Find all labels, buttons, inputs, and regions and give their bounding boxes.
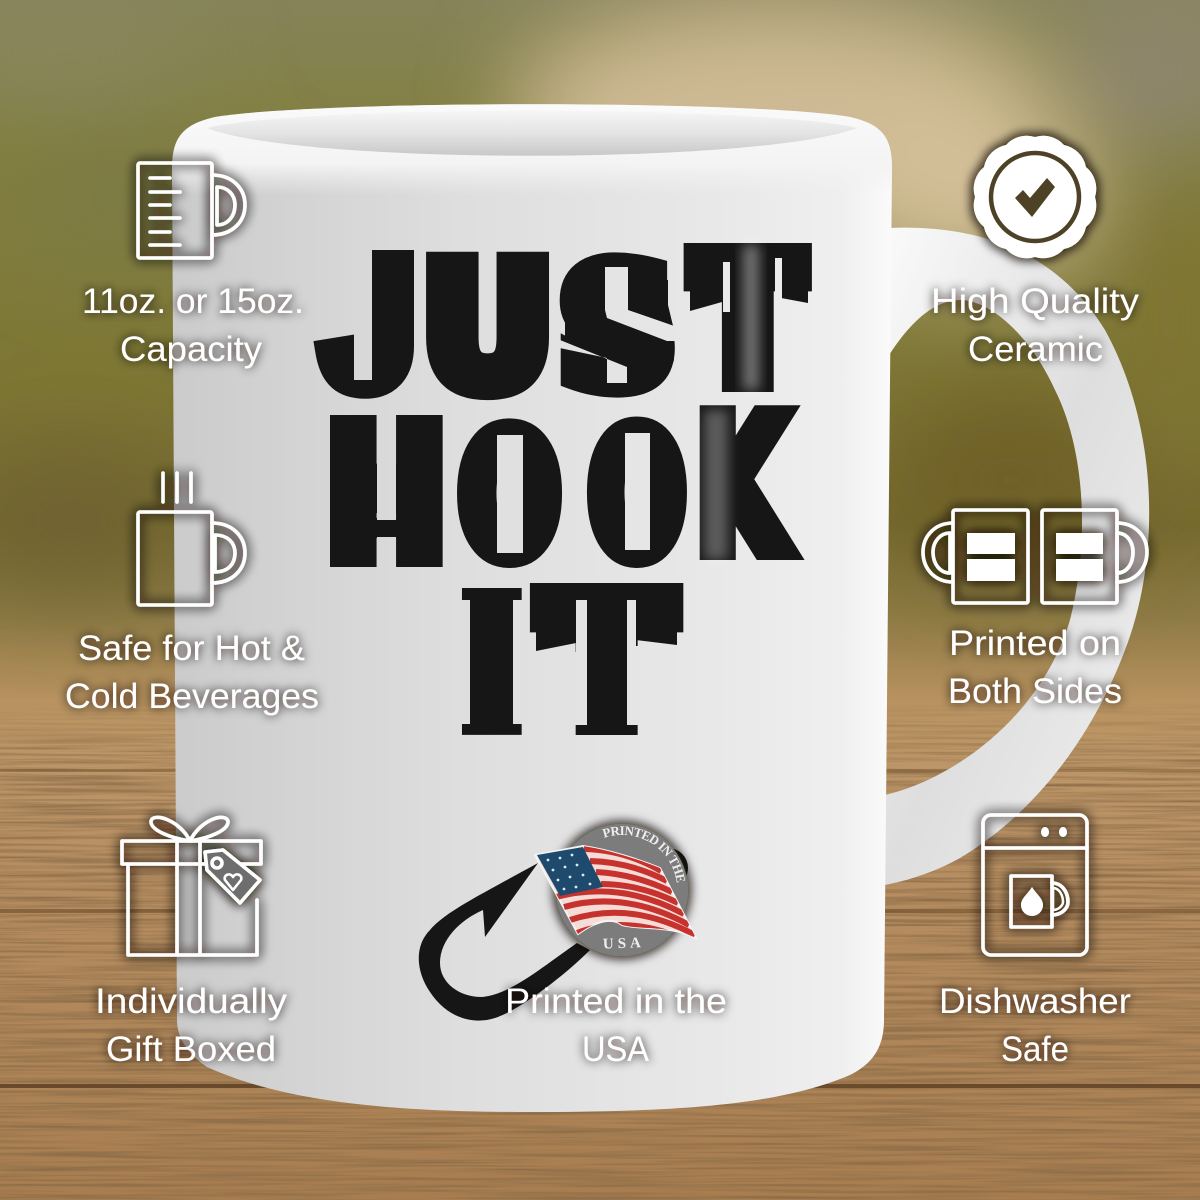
mug interior — [207, 111, 857, 156]
American flag — [535, 846, 700, 946]
printed in the USA badge — [534, 813, 699, 967]
label: capacity: 11oz. or 15oz. — [82, 282, 304, 321]
label: gift boxed: Individually — [95, 982, 288, 1021]
label: high quality ceramic: Ceramic — [968, 330, 1103, 369]
icon: hot and cold mug — [138, 473, 245, 605]
label: dishwasher safe: Dishwasher — [939, 982, 1131, 1021]
label: printed in the USA: Printed in the — [505, 982, 727, 1021]
blurred background — [0, 0, 1200, 700]
mug handle — [885, 228, 1149, 885]
fish hook — [419, 848, 688, 1021]
label: dishwasher safe: Safe — [1001, 1030, 1069, 1069]
label: printed on both sides: Both Sides — [948, 672, 1122, 711]
label: capacity: Capacity — [120, 330, 263, 369]
mug slogan: JUST HOOK IT — [324, 221, 808, 764]
icon: two sided mugs — [923, 510, 1147, 603]
label: hot and cold: Cold Beverages — [65, 677, 319, 716]
mug slogan: JUST HOOK IT: O — [589, 397, 685, 594]
mug slogan: JUST HOOK IT: U — [423, 230, 553, 426]
icon: gift box — [122, 817, 261, 955]
label: printed on both sides — [948, 624, 1122, 711]
mug slogan: JUST HOOK IT: K — [697, 383, 787, 590]
icon: quality badge — [974, 136, 1096, 258]
wooden table — [0, 699, 1200, 1200]
icon: dishwasher — [983, 815, 1087, 955]
label: printed in the USA — [505, 982, 727, 1069]
label: printed in the USA: USA — [582, 1030, 650, 1069]
icon: mug capacity — [138, 163, 245, 258]
label: capacity — [82, 282, 304, 369]
label: gift boxed — [95, 982, 288, 1069]
mug slogan: JUST HOOK IT: S — [559, 235, 675, 423]
label: hot and cold: Safe for Hot & — [78, 629, 305, 668]
badge arc text top: PRINTED IN THE — [602, 826, 685, 882]
label: high quality ceramic: High Quality — [931, 282, 1140, 321]
label: gift boxed: Gift Boxed — [106, 1030, 276, 1069]
mug body — [172, 104, 892, 1112]
label: dishwasher safe — [939, 982, 1131, 1069]
mug slogan: JUST HOOK IT: T — [694, 221, 802, 421]
mug slogan: JUST HOOK IT: I — [458, 567, 526, 763]
label: printed on both sides: Printed on — [949, 624, 1121, 663]
mug slogan: JUST HOOK IT: T — [542, 560, 671, 764]
label: hot and cold — [65, 629, 319, 716]
badge arc text bottom: USA — [603, 935, 645, 953]
mug slogan: JUST HOOK IT: H — [327, 392, 446, 597]
mug slogan: JUST HOOK IT: O — [459, 400, 560, 594]
mug slogan: JUST HOOK IT: J — [324, 224, 414, 422]
label: high quality ceramic — [931, 282, 1140, 369]
